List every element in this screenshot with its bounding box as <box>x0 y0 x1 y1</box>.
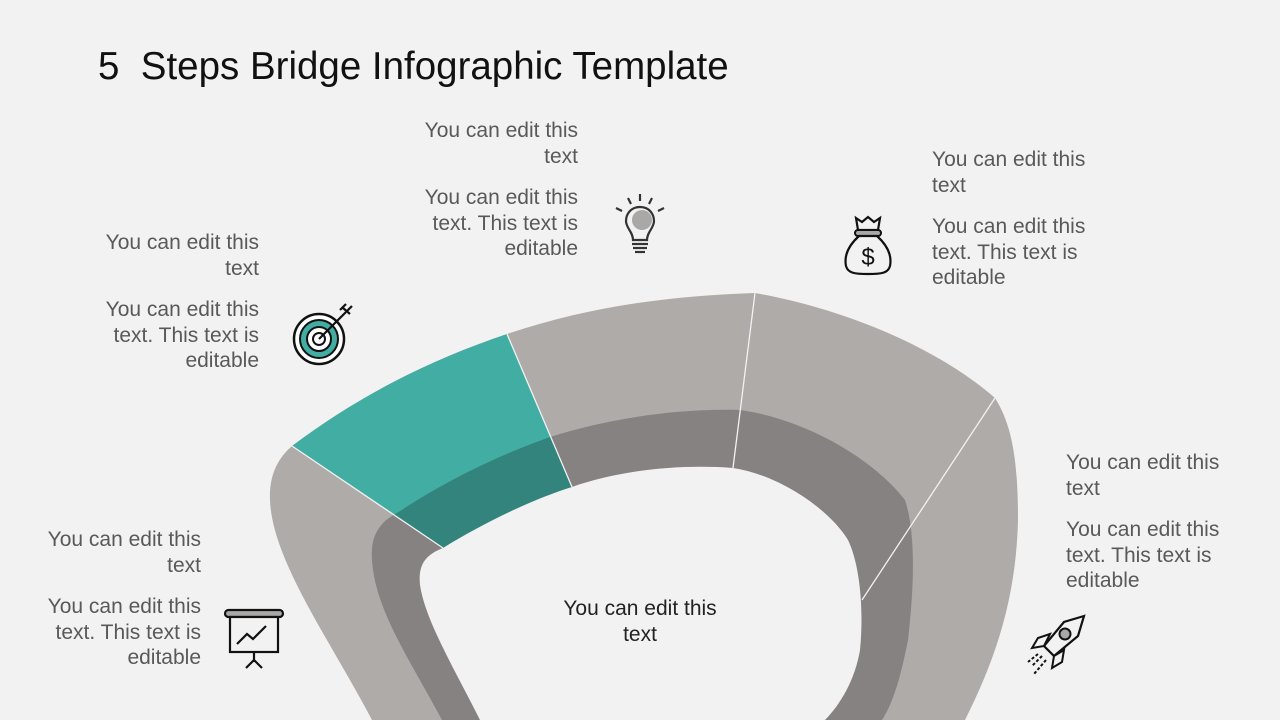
text block: step 2 top center <box>425 119 578 260</box>
icon: rocket <box>1027 614 1086 674</box>
text block: bottom left: text <box>167 554 201 576</box>
text block: step 1 left: text <box>225 256 259 280</box>
icon: presentation board <box>224 608 284 669</box>
text block: step 1 left: You can edit this <box>106 298 259 321</box>
text block: step 1 left <box>106 231 259 372</box>
bridge outer ring <box>270 293 1018 720</box>
text block: step 4 right: You can edit this <box>1066 518 1219 541</box>
text block: step 3 top right: You can edit this <box>932 215 1085 238</box>
text block: step 2 top center: editable <box>504 237 578 260</box>
text block: step 4 right <box>1066 451 1219 592</box>
text block: bottom left: text. This text is <box>56 620 201 644</box>
text block: step 3 top right: You can edit this <box>932 148 1085 171</box>
center text: text <box>623 622 657 646</box>
text block: step 4 right: editable <box>1066 569 1140 592</box>
text block: step 3 top right <box>932 148 1085 289</box>
text block: step 2 top center: text. This text is <box>432 212 578 234</box>
text block: step 3 top right: text. This text is <box>932 240 1078 264</box>
text block: step 4 right: text <box>1066 476 1100 500</box>
icon: money bag: $ <box>861 244 875 271</box>
inner dark band <box>372 410 913 720</box>
text block: step 3 top right: text <box>932 174 966 196</box>
center text <box>563 597 717 646</box>
center text: You can edit this <box>563 597 717 620</box>
icon: money bag <box>844 216 892 276</box>
text block: step 1 left: You can edit this <box>106 231 259 254</box>
text block: step 4 right: text. This text is <box>1066 544 1212 566</box>
text block: step 2 top center: You can edit this <box>425 186 578 209</box>
icon: light bulb <box>616 194 664 254</box>
text block: bottom left: editable <box>127 646 201 669</box>
text block: step 1 left: text. This text is <box>114 324 259 346</box>
teal step segment <box>292 334 572 548</box>
text block: step 4 right: You can edit this <box>1066 451 1219 474</box>
text block: bottom left: You can edit this <box>48 528 201 551</box>
text block: bottom left: You can edit this <box>48 595 201 618</box>
bridge graphic <box>270 293 1018 720</box>
text block: step 1 left: editable <box>185 349 259 372</box>
divider lines <box>292 293 995 600</box>
text block: bottom left <box>48 528 201 669</box>
icon: target <box>292 303 353 366</box>
text block: step 3 top right: editable <box>932 266 1006 289</box>
title: 5 Steps Bridge Infographic Template <box>98 45 729 88</box>
inner hole <box>420 467 862 720</box>
text block: step 2 top center: You can edit this <box>425 119 578 142</box>
text block: step 2 top center: text <box>544 144 578 168</box>
